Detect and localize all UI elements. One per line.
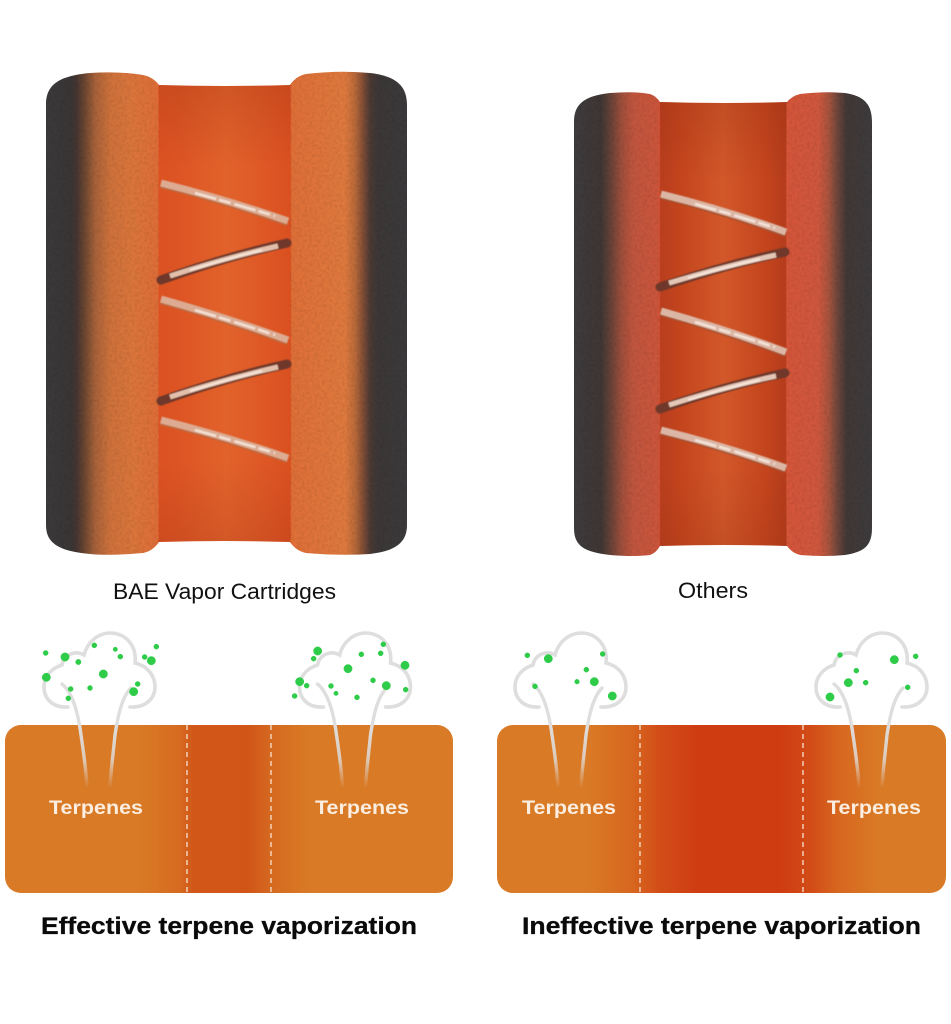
panel: effective heat band (5, 725, 453, 893)
cartridge: BAE Vapor Cartridges (46, 70, 407, 560)
label: Terpenes 1: Terpenes (49, 797, 143, 819)
panel: ineffective heat band (497, 725, 946, 893)
label: BAE Vapor Cartridges: BAE Vapor Cartridges (113, 579, 336, 604)
icon: vapor cloud 4 (816, 633, 927, 787)
label: Others: Others (678, 578, 748, 603)
caption: effective: Effective terpene vaporization (41, 913, 417, 940)
label: Terpenes 3: Terpenes (522, 797, 616, 819)
caption: ineffective: Ineffective terpene vaporization (522, 913, 921, 940)
cartridge: Others (574, 90, 872, 560)
coil: BAE wire (161, 183, 288, 459)
icon: vapor cloud 3 (515, 633, 626, 787)
coil: Others wire (660, 194, 786, 469)
icon: vapor cloud 1 (44, 633, 155, 787)
label: Terpenes 4: Terpenes (827, 797, 921, 819)
green terpene dots: ineffective (525, 651, 918, 701)
label: Terpenes 2: Terpenes (315, 797, 409, 819)
icon: vapor cloud 2 (300, 633, 410, 787)
green terpene dots: effective (42, 642, 409, 701)
